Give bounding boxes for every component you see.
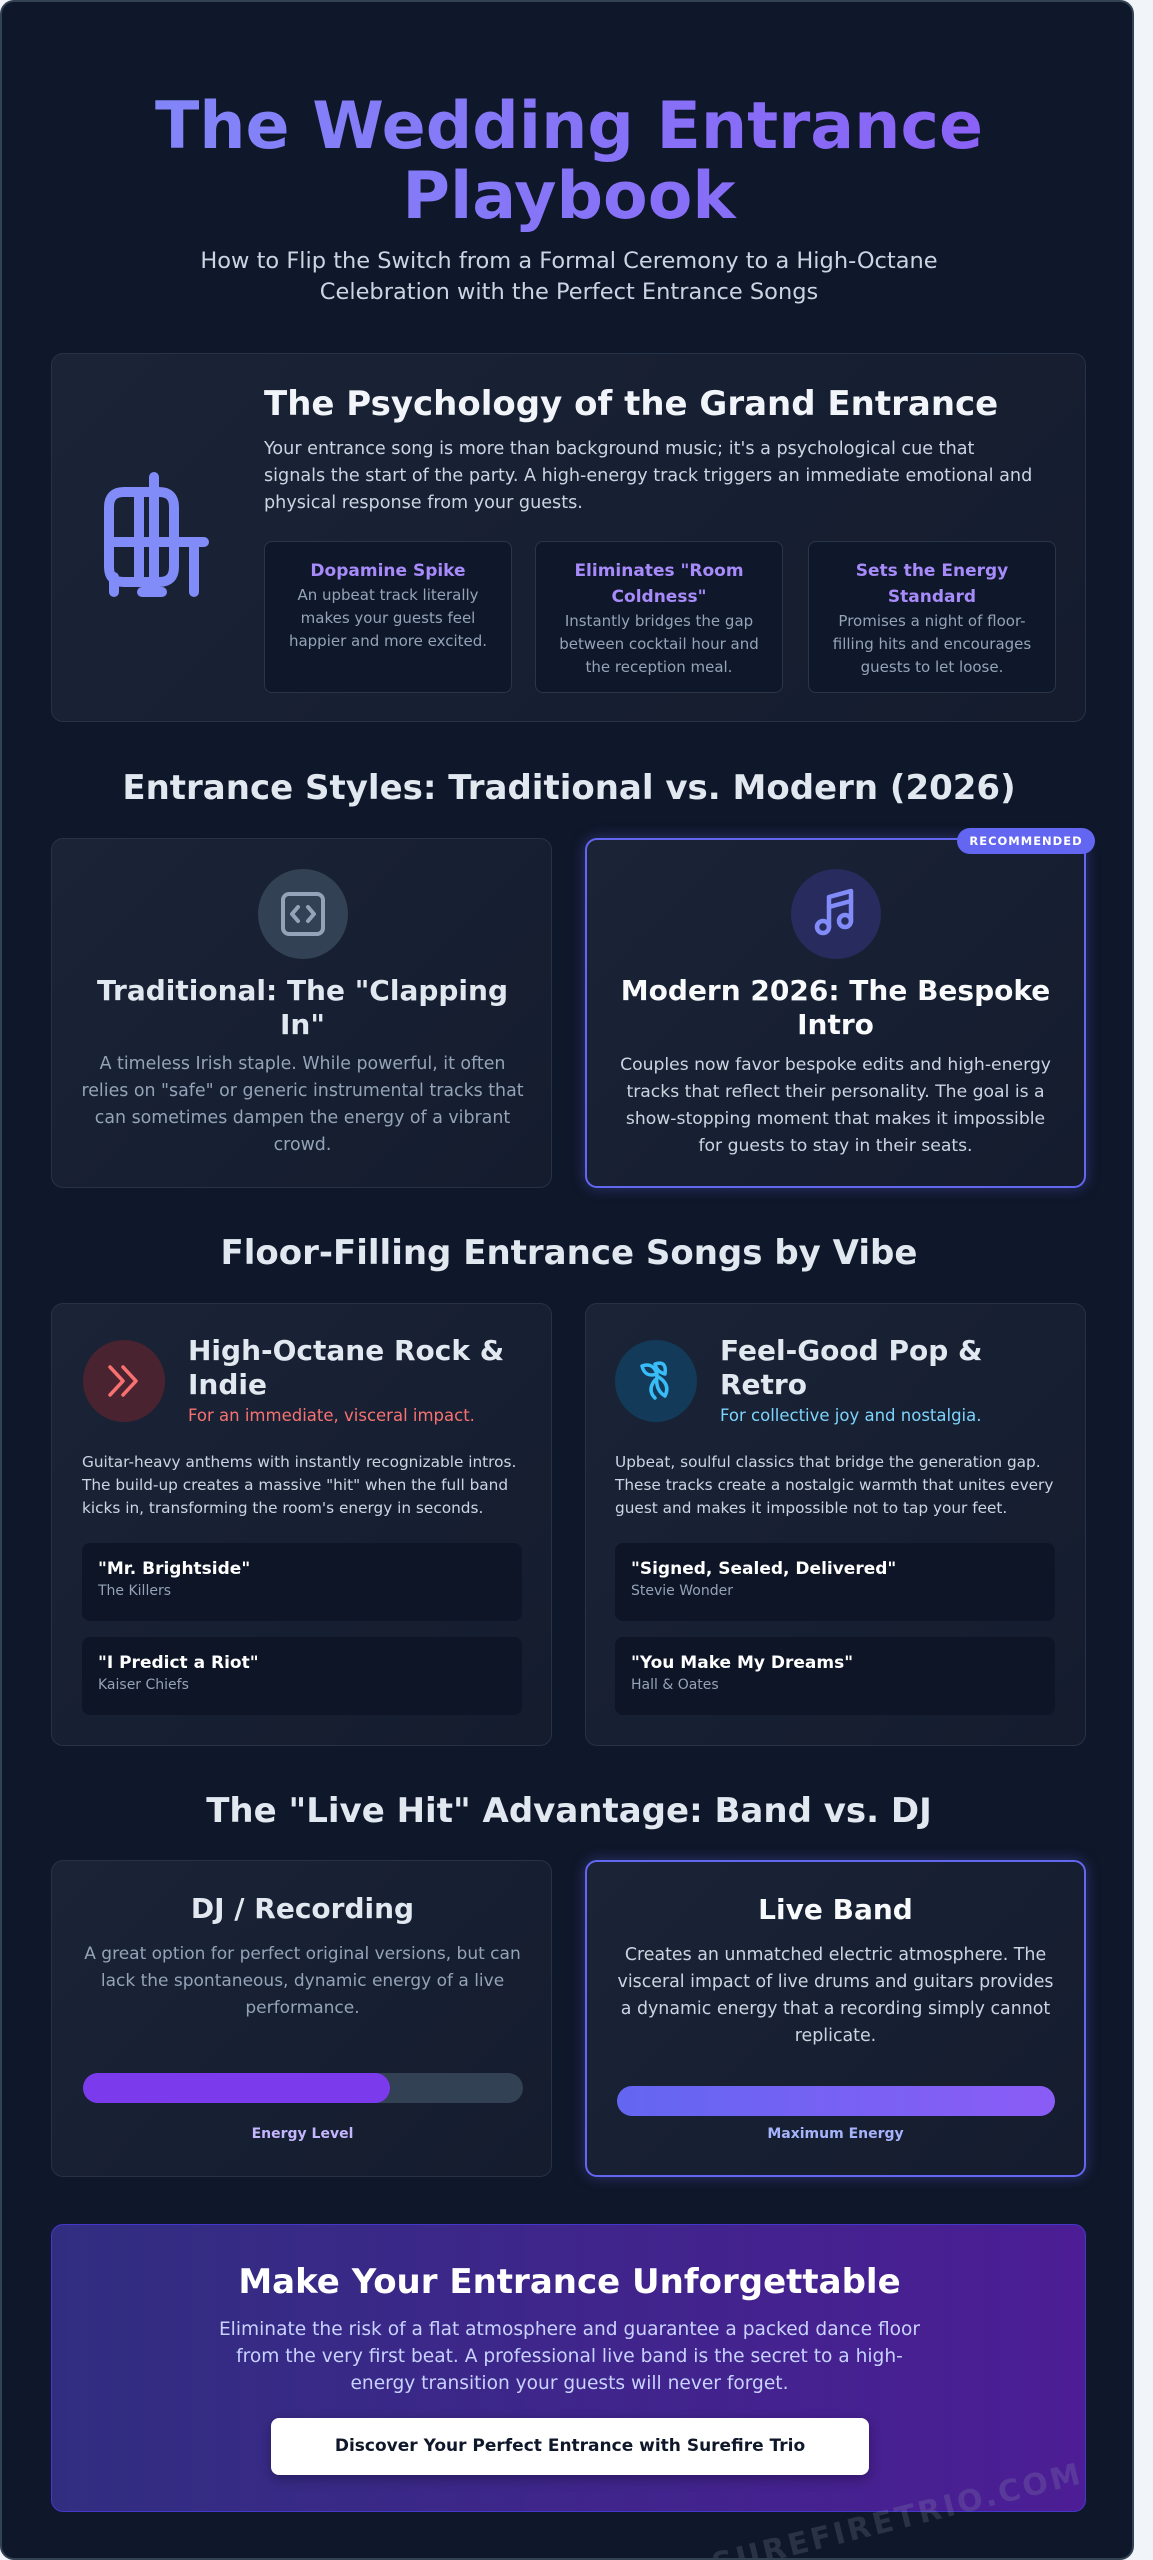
- label: energy level: Energy Level: [252, 2126, 353, 2142]
- tagline: pop: For collective joy and nostalgia.: [720, 1406, 982, 1425]
- heading: entrance styles: Entrance Styles: Traditional vs. Modern (2026): [122, 768, 1016, 808]
- box: room coldness: [535, 541, 783, 693]
- icon: chevrons: [83, 1340, 165, 1422]
- song: mr brightside: "Mr. Brightside": [98, 1559, 250, 1579]
- heading: songs by vibe: Floor-Filling Entrance Songs by Vibe: [221, 1233, 917, 1273]
- title: dj: DJ / Recording: [191, 1892, 414, 1925]
- heading: psychology: The Psychology of the Grand Entrance: [264, 384, 998, 424]
- song: signed sealed delivered: Stevie Wonder: [631, 1583, 733, 1599]
- title: Playbook: [402, 159, 736, 234]
- song: i predict a riot: [82, 1637, 522, 1715]
- song: mr brightside: [82, 1543, 522, 1621]
- box: dopamine: An upbeat track literally makes your guests feel happier and more excited.: [289, 586, 487, 650]
- text: pop: Upbeat, soulful classics that bridge the generation gap. These tracks create a nostalgic warmth that unites every guest and makes it impossible not to tap your feet.: [615, 1453, 1053, 1517]
- box: room coldness: Instantly bridges the gap between cocktail hour and the reception meal.: [559, 612, 759, 676]
- badge: recommended: RECOMMENDED: [969, 834, 1083, 848]
- title: pop: Feel-Good Pop & Retro: [720, 1334, 982, 1401]
- text: dj: A great option for perfect original versions, but can lack the spontaneous, dynamic energy of a live performance.: [84, 1944, 521, 2018]
- title: live band: Live Band: [758, 1893, 913, 1926]
- heading: cta: Make Your Entrance Unforgettable: [238, 2262, 901, 2302]
- box: dopamine: [264, 541, 512, 693]
- text: psychology intro: Your entrance song is more than background music; it's a psychological cue that: [264, 439, 974, 459]
- box: energy standard: [808, 541, 1056, 693]
- title: The Wedding Entrance: [155, 89, 983, 164]
- text: cta: energy transition your guests will never forget.: [350, 2373, 789, 2394]
- song: i predict a riot: "I Predict a Riot": [98, 1653, 259, 1673]
- text: psychology intro: [264, 439, 1032, 513]
- song: you make my dreams: [615, 1637, 1055, 1715]
- song: you make my dreams: "You Make My Dreams": [631, 1653, 853, 1673]
- panel: dj: [51, 1860, 552, 2177]
- song: signed sealed delivered: [615, 1543, 1055, 1621]
- panel: traditional: [51, 838, 552, 1188]
- title: rock: High-Octane Rock & Indie: [188, 1334, 504, 1401]
- box: dopamine: Dopamine Spike: [310, 561, 466, 581]
- label: maximum energy: Maximum Energy: [767, 2126, 904, 2142]
- title: modern: Modern 2026: The Bespoke Intro: [621, 974, 1050, 1041]
- badge: recommended: [957, 828, 1095, 854]
- text: rock: Guitar-heavy anthems with instantly recognizable intros. The build-up creates a massive "hit" when the full band kicks in, transforming the room's energy in seconds.: [82, 1453, 516, 1517]
- text: modern: Couples now favor bespoke edits and high-energy tracks that reflect their personality. The goal is a show-stopping moment that makes it impossible for guests to stay in their seats.: [620, 1055, 1051, 1156]
- button: cta: [271, 2418, 869, 2475]
- song: signed sealed delivered: "Signed, Sealed, Delivered": [631, 1559, 896, 1579]
- panel: psychology: [51, 353, 1086, 722]
- box: energy standard: Sets the Energy Standard: [856, 561, 1008, 607]
- icon: code box: [258, 869, 348, 959]
- panel: live band: [585, 1860, 1086, 2177]
- icon: cart: [104, 472, 209, 597]
- text: psychology intro: signals the start of the party. A high-energy track triggers an immediate emotional and physical response from your guests.: [264, 466, 1032, 513]
- box: room coldness: Eliminates "Room Coldness": [574, 561, 744, 607]
- bar: max energy: [617, 2086, 1055, 2116]
- heading: band vs dj: The "Live Hit" Advantage: Band vs. DJ: [206, 1791, 932, 1831]
- text: cta: Eliminate the risk of a flat atmosphere and guarantee a packed dance floor: [219, 2319, 920, 2340]
- panel: cta: [51, 2224, 1086, 2512]
- title: [2, 92, 1136, 232]
- song: mr brightside: The Killers: [98, 1583, 171, 1599]
- song: you make my dreams: Hall & Oates: [631, 1677, 719, 1693]
- title: traditional: Traditional: The "Clapping In": [97, 974, 508, 1041]
- text: traditional: A timeless Irish staple. While powerful, it often relies on "safe" or generic instrumental tracks that can sometimes dampen the energy of a vibrant crowd.: [81, 1054, 524, 1155]
- box: energy standard: Promises a night of floor-filling hits and encourages guests to let loose.: [833, 612, 1031, 676]
- panel: rock: [51, 1303, 552, 1746]
- text: cta: [219, 2319, 920, 2394]
- text: cta: from the very first beat. A professional live band is the secret to a high-: [236, 2346, 903, 2367]
- text: live band: Creates an unmatched electric atmosphere. The visceral impact of live drums and guitars provides a dynamic energy that a recording simply cannot replicate.: [618, 1945, 1053, 2046]
- tagline: rock: For an immediate, visceral impact.: [188, 1406, 475, 1425]
- subtitle: How to Flip the Switch from a Formal Ceremony to a High-Octane Celebration with the Perfect Entrance Songs: [200, 248, 938, 305]
- song: i predict a riot: Kaiser Chiefs: [98, 1677, 189, 1693]
- panel: modern: [585, 838, 1086, 1188]
- bar: dj energy: [83, 2073, 523, 2103]
- icon: music note: [791, 869, 881, 959]
- panel: pop: [585, 1303, 1086, 1746]
- icon: butterfly: [615, 1340, 697, 1422]
- button: cta: Discover Your Perfect Entrance with Surefire Trio: [335, 2436, 805, 2456]
